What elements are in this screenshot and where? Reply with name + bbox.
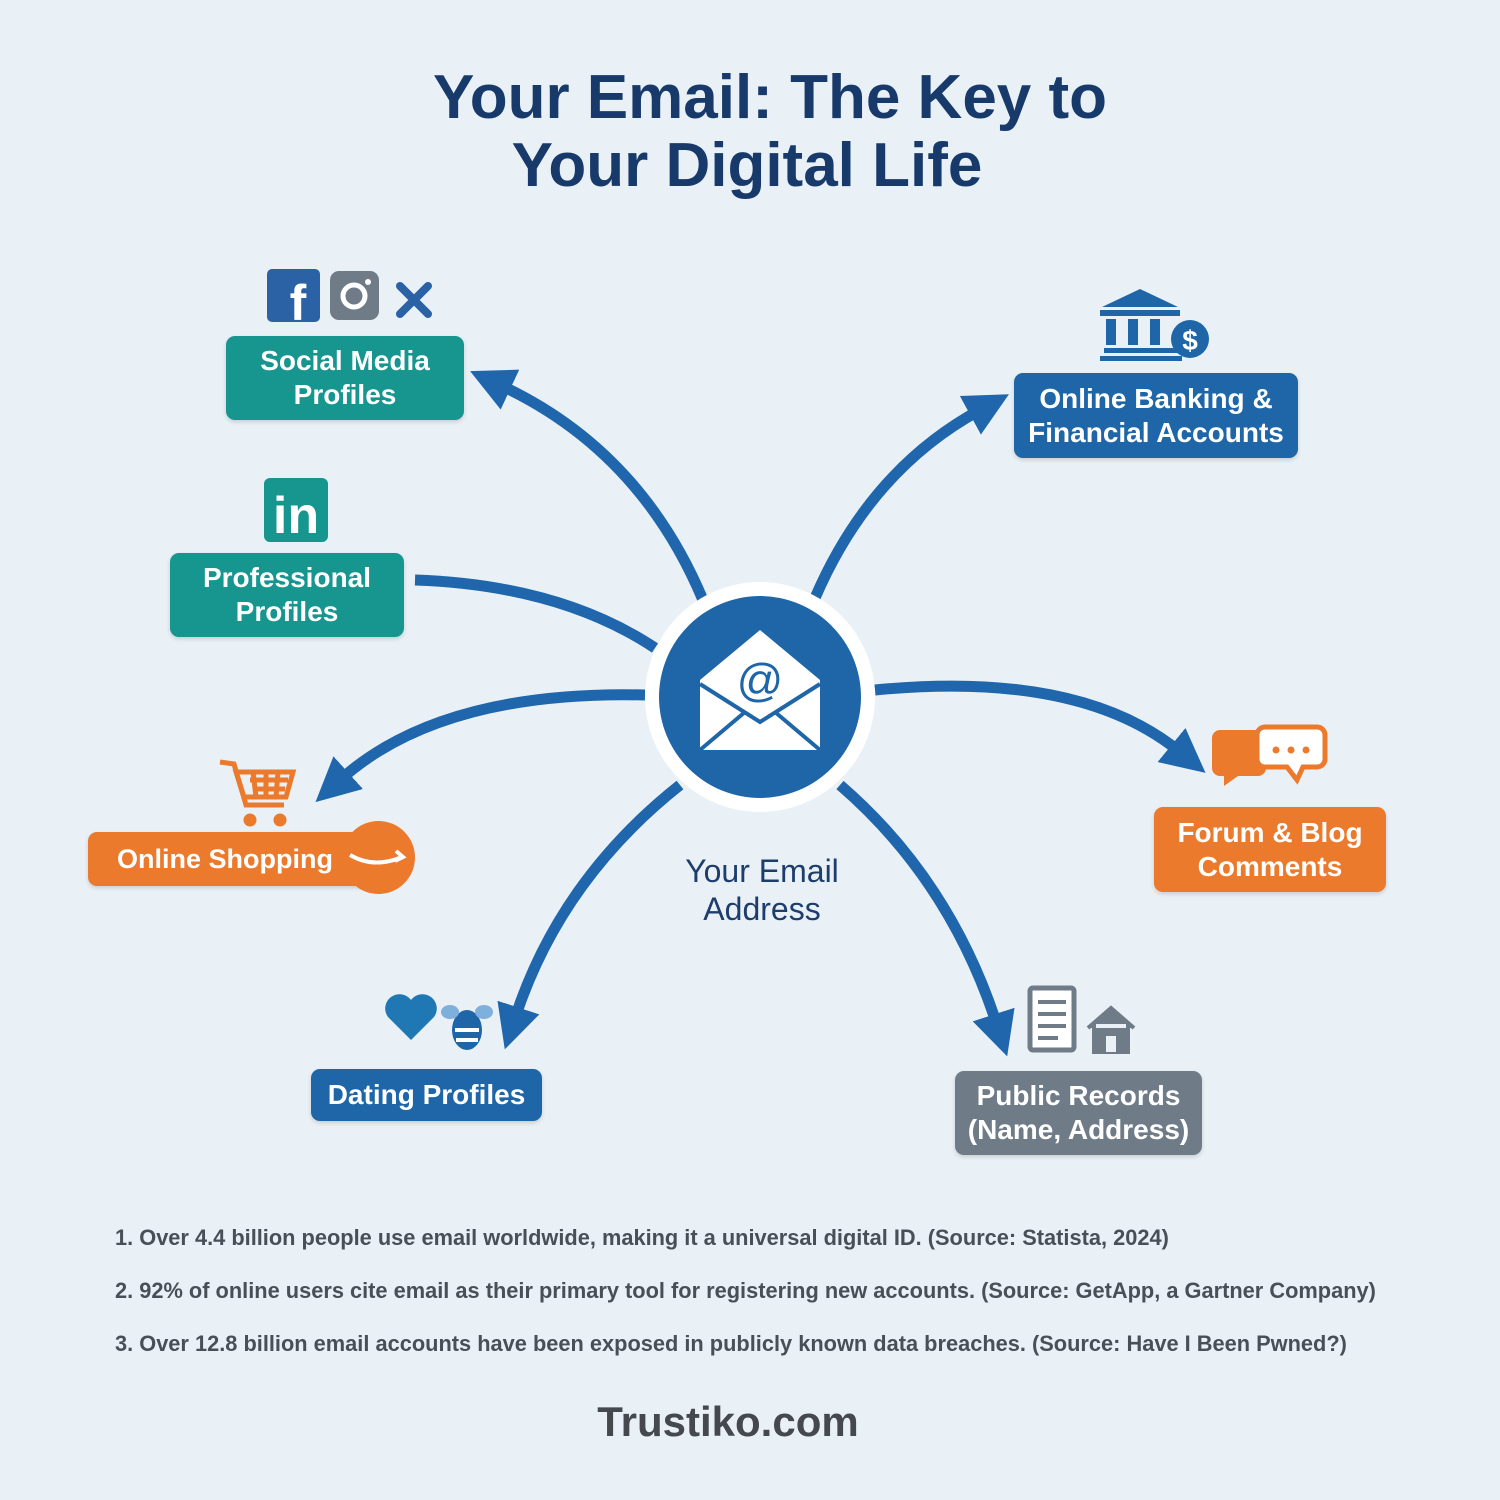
icon: document and house bbox=[1030, 988, 1134, 1052]
icon: linkedin bbox=[264, 478, 328, 545]
icon: facebook bbox=[267, 269, 320, 331]
icon: linkedin: in bbox=[273, 487, 319, 545]
center label bbox=[685, 853, 839, 927]
box: social media: Social Media bbox=[260, 345, 430, 376]
box: dating: Dating Profiles bbox=[328, 1079, 525, 1110]
icon: heart and bee bbox=[385, 994, 493, 1050]
icon: shopping circle bbox=[342, 821, 415, 894]
box: social media bbox=[226, 336, 464, 420]
box: social media: Profiles bbox=[294, 379, 396, 410]
box: forum bbox=[1154, 807, 1386, 892]
center label: Your Email bbox=[685, 853, 839, 889]
box: professional: Professional bbox=[203, 562, 371, 593]
box: professional: Profiles bbox=[236, 596, 338, 627]
box: online shopping bbox=[88, 832, 388, 886]
center label: Address bbox=[703, 891, 821, 927]
center email icon: @ bbox=[737, 654, 783, 706]
title: Your Digital Life bbox=[512, 131, 982, 200]
icon: chat bubbles bbox=[1212, 727, 1325, 786]
center email icon bbox=[645, 582, 875, 812]
footnote 3: 3. Over 12.8 billion email accounts have been exposed in publicly known data breaches. (Source: Have I Been Pwned?) bbox=[115, 1331, 1347, 1356]
icon: facebook: f bbox=[290, 275, 307, 331]
footnote 2: 2. 92% of online users cite email as their primary tool for registering new accounts. (Source: GetApp, a Gartner Company) bbox=[115, 1278, 1376, 1303]
box: professional bbox=[170, 553, 404, 637]
icon: x bbox=[400, 286, 428, 314]
footnote 1: 1. Over 4.4 billion people use email worldwide, making it a universal digital ID. (Source: Statista, 2024) bbox=[115, 1225, 1169, 1250]
icon: bank: $ bbox=[1182, 325, 1198, 356]
box: public records: (Name, Address) bbox=[968, 1114, 1189, 1145]
box: online shopping: Online Shopping bbox=[117, 844, 333, 874]
box: public records: Public Records bbox=[977, 1080, 1180, 1111]
icon: cart bbox=[220, 762, 293, 824]
box: banking: Financial Accounts bbox=[1028, 416, 1284, 448]
box: forum: Forum & Blog bbox=[1177, 816, 1363, 848]
arrows bbox=[340, 385, 1180, 1025]
title bbox=[433, 63, 1107, 200]
box: banking: Online Banking & bbox=[1039, 382, 1273, 414]
title: Your Email: The Key to bbox=[433, 63, 1107, 132]
brand: Trustiko.com bbox=[597, 1398, 859, 1445]
box: dating bbox=[311, 1069, 542, 1121]
icon: bank bbox=[1100, 289, 1209, 361]
box: banking bbox=[1014, 373, 1298, 458]
box: forum: Comments bbox=[1198, 850, 1342, 882]
box: public records bbox=[955, 1071, 1202, 1155]
icon: instagram bbox=[330, 271, 379, 320]
